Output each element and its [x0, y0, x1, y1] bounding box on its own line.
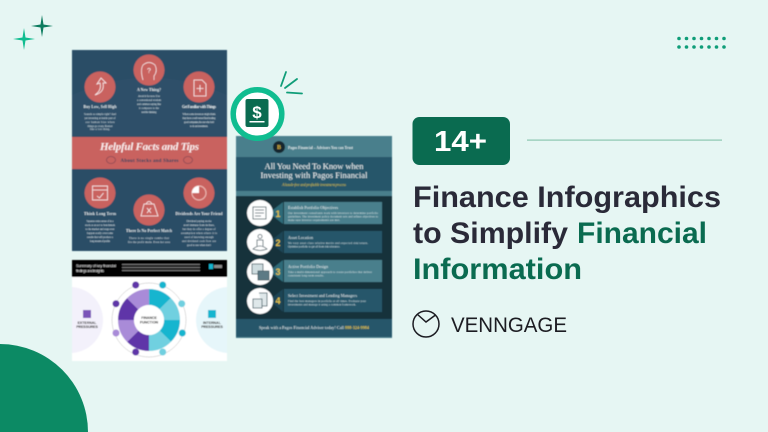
step 4	[247, 288, 382, 314]
heading band: helpful facts	[72, 137, 227, 169]
text: dividends: Dividends Are Your Friend	[176, 212, 223, 216]
step 4: investments and manage it using a common framework.	[288, 304, 356, 306]
poster title: A hassle-free and profitable investment process	[281, 182, 346, 187]
text: new thing: it compares to the	[139, 107, 160, 110]
text: dividends: but they do offer a degree of	[182, 228, 216, 231]
text: long term: long stream of profits	[90, 240, 110, 243]
text: new thing: terrible thinking	[142, 111, 157, 114]
logo: venngage: VENNGAGE	[451, 314, 567, 337]
icon: buy low arrow	[84, 72, 116, 102]
external pressures circle: EXTERNAL	[78, 321, 97, 325]
text: long term: happen easily overcome	[87, 232, 114, 235]
poster title	[236, 157, 392, 191]
header bar	[72, 260, 227, 277]
poster title: Investing with Pagos Financial	[260, 170, 368, 180]
divider line	[527, 140, 722, 141]
text: new thing: Avoid it for now. Use	[138, 95, 161, 98]
title: Financial	[577, 217, 707, 250]
corner quarter circle	[0, 344, 88, 432]
poster title: All You Need To Know when	[264, 161, 364, 171]
step 3: 3	[275, 267, 281, 277]
logo: venngage	[413, 311, 567, 337]
step 2: 2	[275, 238, 281, 248]
text: long term: results that will produce a	[87, 236, 114, 239]
icon: dollar book badge: $	[252, 103, 262, 122]
step 2: Optimise portfolio to get all from risk tolerance.	[288, 246, 340, 248]
dot grid	[677, 37, 726, 49]
text: buy low: like a lost thing.	[90, 128, 110, 131]
text: perfect match: There Is No Perfect Match	[126, 229, 173, 233]
text: perfect match: There is no single combo that	[129, 237, 169, 240]
text: long term	[84, 212, 117, 243]
badge: 14+: 14+	[434, 126, 487, 158]
wheel chart: FINANCE	[141, 316, 157, 320]
internal pressures circle: PRESSURES	[201, 325, 223, 329]
external pressures circle: PRESSURES	[76, 325, 98, 329]
poster header	[273, 141, 354, 153]
text: dividends: good to use when don't	[187, 244, 211, 247]
text: buy low: yet investing at inside part of	[84, 117, 116, 120]
poster header: B	[277, 145, 281, 151]
text: dividends: and dividend cash flow are	[182, 240, 217, 243]
step 1: make sure investor requirements are met.	[288, 219, 340, 222]
wheel chart: FUNCTION	[140, 320, 159, 324]
step 1	[247, 200, 382, 226]
internal pressures circle	[196, 287, 227, 353]
badge: 14+	[412, 117, 510, 165]
step 2: We vary asset class relative merits and expected risk/return.	[288, 242, 368, 245]
text: buy low: our human bias when	[86, 121, 115, 124]
step 2: Asset Location	[288, 235, 313, 240]
step 4: Select Investment and Lending Managers	[288, 293, 357, 298]
poster footer	[236, 319, 392, 337]
text: new thing: A New Thing?	[137, 88, 161, 92]
internal pressures circle: INTERNAL	[203, 321, 222, 325]
text: long term: stock as an act to benchmark	[85, 224, 116, 227]
title	[413, 181, 721, 286]
external pressures circle	[72, 288, 103, 352]
icon: emphasis ticks	[281, 72, 302, 94]
text: familiar things: Get Familiar with Things	[182, 105, 217, 109]
step 2	[247, 229, 382, 255]
icon: calendar check	[84, 178, 116, 208]
step 3: consistent long-term results.	[288, 274, 324, 278]
step 3: Take a multi-dimensional approach to create portfolios that deliver	[288, 271, 372, 274]
text: dividends: assumption when others it is	[181, 232, 217, 235]
panel: stocks and shares poster	[72, 50, 227, 251]
text: new thing	[137, 88, 162, 114]
text: familiar things: good companies, the one who bold	[184, 121, 215, 124]
header bar: Summary of key financial	[76, 263, 116, 268]
step 3	[247, 259, 382, 285]
step 3: Active Portfolio Design	[288, 264, 328, 269]
text: dividends	[176, 212, 223, 247]
text: familiar things: When some investors might think	[182, 113, 216, 116]
text: long term: Squeeze extra sense of in a	[86, 220, 114, 223]
step 1: 1	[275, 209, 281, 219]
text: perfect match: fits the profit made. Even hot area	[128, 241, 171, 244]
text: dividends: used of knowing enough	[184, 236, 214, 239]
title: Information	[413, 253, 582, 286]
poster footer: 888-324-9984	[345, 325, 370, 330]
text: dividends: Dividend paying stocks	[186, 220, 212, 223]
heading band: helpful facts: Helpful Facts and Tips	[99, 141, 199, 153]
step 4: 4	[275, 296, 281, 306]
poster footer: Speak with a Pagos Financial Adviser today! Call	[259, 325, 345, 330]
poster header: Pagos Financial – Advisors You can Trust	[288, 146, 354, 150]
icon: dividends pie	[184, 178, 214, 208]
text: dividends: aren't immune from declines,	[184, 224, 215, 227]
text: new thing: a conventional wisdom	[137, 99, 162, 102]
text: buy low: things go crazy. Restart	[88, 125, 113, 128]
step 1: Establish Portfolio Objectives	[288, 205, 338, 210]
text: long term: Think Long Term	[84, 212, 117, 216]
text: buy low: Sounds so simple right? And	[84, 113, 117, 116]
text: buy low	[84, 105, 117, 131]
icon: document plus	[184, 72, 214, 102]
title: Finance Infographics	[413, 181, 721, 214]
header bar: findings and insights	[76, 268, 104, 273]
icon: sparkles	[13, 15, 53, 50]
text: perfect match	[126, 229, 173, 244]
text: familiar things	[182, 105, 217, 128]
icon: new thing head: ?	[147, 68, 151, 75]
wheel chart	[112, 282, 186, 357]
panel: finance function poster	[71, 259, 228, 361]
icon: bag with cross	[134, 194, 164, 226]
step 1: guidelines. The investment policy document sets and refines objectives to	[288, 216, 379, 218]
text: long term: to the market and stage ever	[86, 228, 115, 231]
step 4: Find the best managers in portfolio at all times. Evaluate your	[288, 300, 366, 303]
heading band: helpful facts: About Stocks and Shares	[120, 159, 179, 164]
icon: dollar book badge	[233, 90, 282, 138]
text: buy low: Buy Low, Sell High	[84, 105, 117, 109]
icon: new thing head	[134, 54, 164, 86]
text: new thing: and common saying like	[137, 103, 162, 106]
text: familiar things: to do an investment.	[190, 125, 208, 128]
title: to Simplify	[413, 217, 568, 250]
text: familiar things: they have a well-versed fund trading	[182, 117, 216, 120]
panel: pagos financial poster	[236, 136, 392, 338]
step 1: Our investment consultants work with investors to determine portfolio	[288, 212, 379, 215]
